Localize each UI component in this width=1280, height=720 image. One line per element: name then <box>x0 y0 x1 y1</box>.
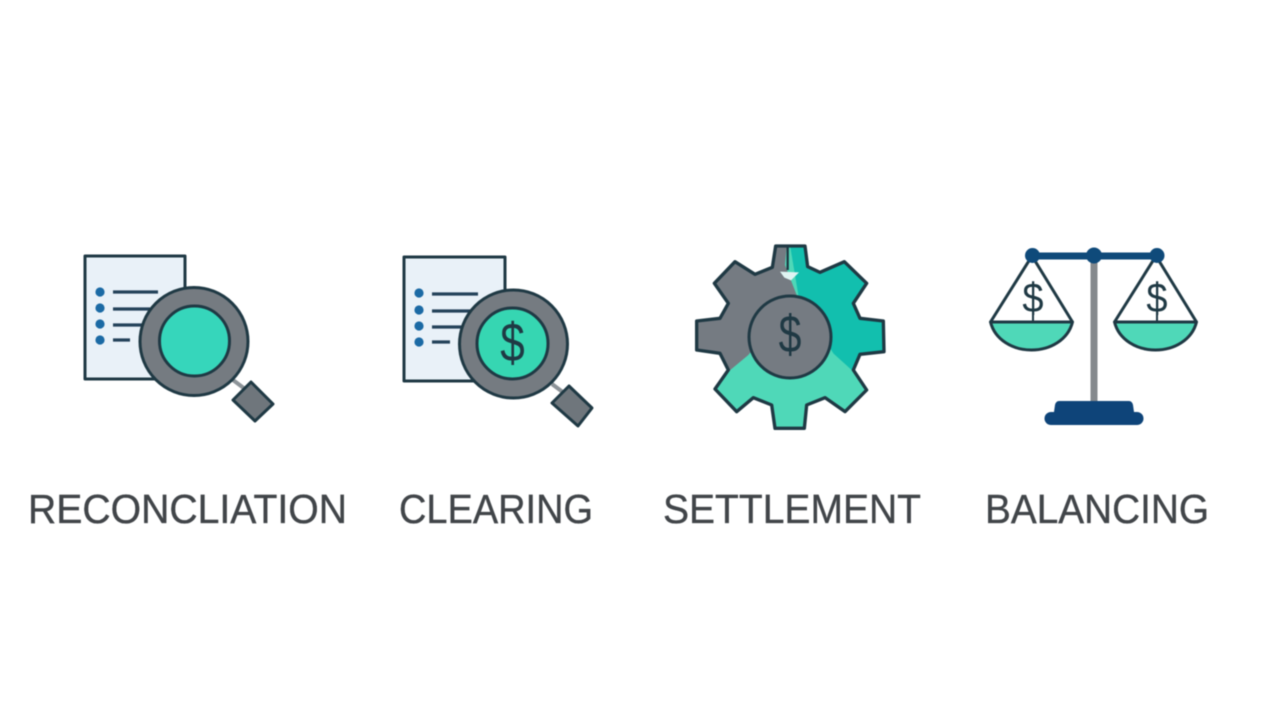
document bullet list <box>414 288 478 347</box>
label: balancing: BALANCING <box>985 486 1209 532</box>
scale beam <box>1025 248 1164 264</box>
scale base <box>1044 401 1144 425</box>
gear segments <box>694 244 886 431</box>
gear hub with dollar: $ <box>779 306 801 365</box>
magnifier lens with dollar <box>460 290 568 398</box>
scale pole <box>1090 256 1098 402</box>
gear outline <box>697 246 884 428</box>
left pan: $ <box>1022 275 1044 321</box>
label: clearing: CLEARING <box>399 486 593 532</box>
label: settlement: SETTLEMENT <box>663 486 921 532</box>
label: reconciliation: RECONCLIATION <box>28 486 347 532</box>
document page <box>404 257 505 381</box>
magnifier lens <box>140 288 248 396</box>
icon: settlement gear with dollar hub <box>694 244 886 431</box>
document bullet list <box>95 287 158 345</box>
document page <box>85 256 185 379</box>
icon: balancing scale <box>990 248 1196 425</box>
right pan <box>1114 256 1196 350</box>
left pan <box>990 256 1072 350</box>
magnifier handle <box>552 384 592 426</box>
magnifier handle <box>233 380 273 421</box>
icon: reconciliation document with magnifier <box>85 256 273 421</box>
right pan: $ <box>1146 275 1168 321</box>
magnifier lens with dollar: $ <box>500 312 525 374</box>
icon: clearing document with dollar magnifier <box>404 257 592 426</box>
gear hub with dollar <box>749 296 831 378</box>
